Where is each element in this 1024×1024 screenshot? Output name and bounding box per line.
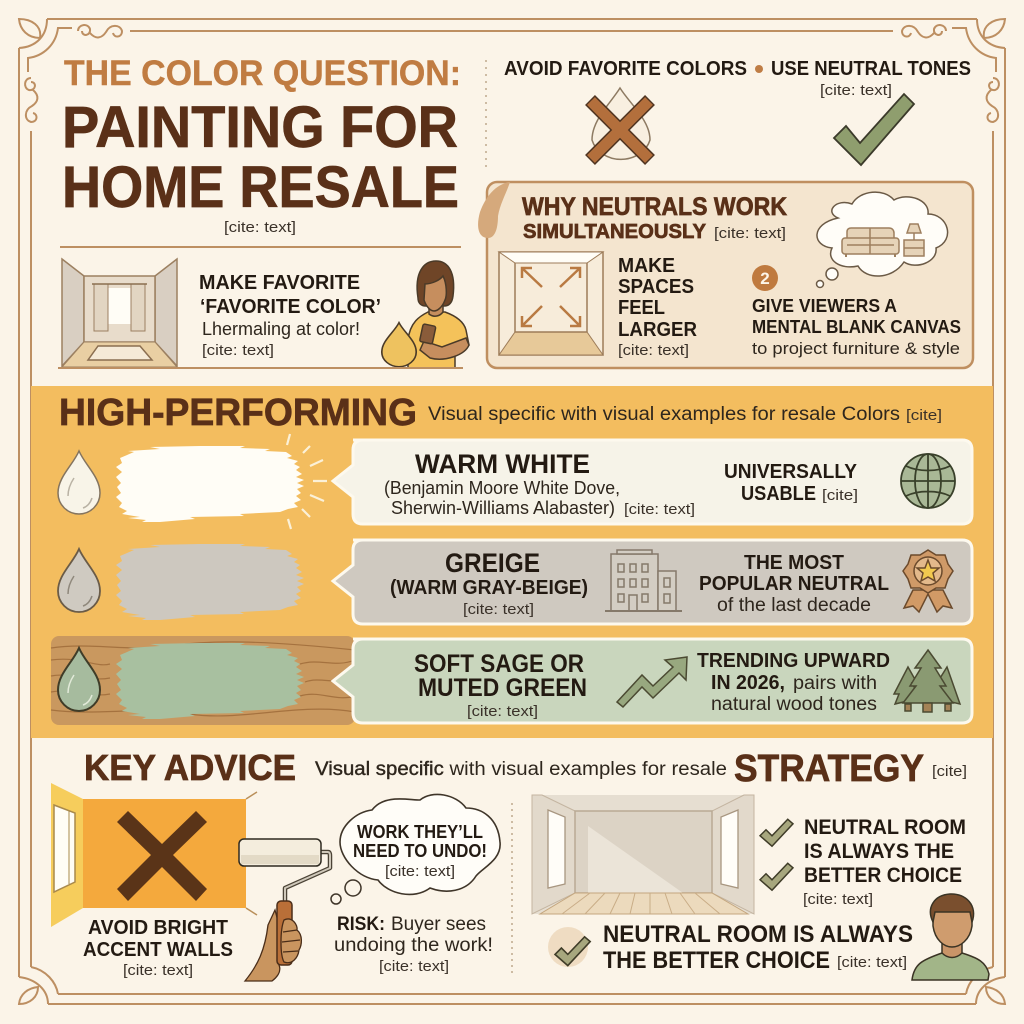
band heading bbox=[59, 392, 942, 434]
sage text: natural wood tones bbox=[711, 694, 877, 715]
text: favorite color: ‘FAVORITE COLOR’ bbox=[200, 296, 381, 318]
heading: key advice strategy: [cite] bbox=[932, 763, 967, 780]
text: make spaces feel larger: FEEL bbox=[618, 297, 665, 319]
sage text: IN 2026, bbox=[711, 672, 785, 694]
text: favorite color: MAKE FAVORITE bbox=[199, 272, 360, 294]
text: mental blank canvas: MENTAL BLANK CANVAS bbox=[752, 317, 961, 337]
icon: check marks bbox=[760, 819, 793, 890]
heading: avoid and use: USE NEUTRAL TONES bbox=[771, 58, 971, 80]
panel heading: SIMULTANEOUSLY bbox=[523, 221, 707, 243]
dotted divider bbox=[485, 60, 487, 167]
heading: key advice strategy: KEY ADVICE bbox=[84, 747, 296, 788]
text: neutral room list: [cite: text] bbox=[803, 891, 873, 908]
text: avoid bright accent walls: AVOID BRIGHT bbox=[88, 917, 228, 939]
text: neutral room list bbox=[803, 816, 966, 908]
text: favorite color: [cite: text] bbox=[202, 342, 274, 359]
panel: why neutrals work bbox=[478, 182, 973, 368]
heading: avoid and use: AVOID FAVORITE COLORS bbox=[504, 58, 747, 80]
text: neutral room conclusion: THE BETTER CHOICE bbox=[603, 947, 830, 974]
icon: expanding room bbox=[499, 252, 603, 355]
greige text: POPULAR NEUTRAL bbox=[699, 573, 889, 595]
icon: globe bbox=[901, 454, 955, 508]
heading: avoid and use bbox=[504, 58, 971, 99]
title: PAINTING FOR bbox=[62, 95, 458, 160]
dotted divider bbox=[511, 803, 513, 975]
text: neutral room conclusion: [cite: text] bbox=[837, 954, 907, 971]
text: neutral room list: IS ALWAYS THE bbox=[804, 840, 954, 863]
text: buyer risk bbox=[334, 914, 493, 975]
text: make spaces feel larger: [cite: text] bbox=[618, 342, 689, 359]
text: favorite color: Lhermaling at color! bbox=[202, 319, 360, 339]
icon: man portrait bbox=[912, 894, 989, 980]
panel heading: WHY NEUTRALS WORK bbox=[522, 193, 787, 221]
thought cloud: work to undo: NEED TO UNDO! bbox=[353, 841, 487, 861]
icon: green check mark bbox=[834, 94, 914, 165]
sage text: SOFT SAGE OR bbox=[414, 650, 584, 678]
text: neutral room conclusion: NEUTRAL ROOM IS ALWAYS bbox=[603, 921, 913, 948]
icon: paint roller and hand bbox=[239, 839, 330, 981]
sage text bbox=[414, 650, 890, 720]
text: neutral room conclusion bbox=[603, 921, 913, 974]
title bbox=[62, 54, 461, 236]
thought cloud: work to undo: WORK THEY’LL bbox=[357, 822, 483, 842]
text: make spaces feel larger: MAKE bbox=[618, 255, 675, 277]
thought cloud: work to undo: [cite: text] bbox=[385, 863, 455, 880]
text: buyer risk: [cite: text] bbox=[379, 958, 449, 975]
warm white text: UNIVERSALLY bbox=[724, 461, 858, 483]
text: buyer risk: RISK: bbox=[337, 914, 385, 935]
divider under title bbox=[60, 246, 461, 248]
text: buyer risk: undoing the work! bbox=[334, 935, 493, 956]
heading: avoid and use: [cite: text] bbox=[820, 82, 892, 99]
wood plank background bbox=[51, 636, 355, 725]
icon: room with curtains bbox=[62, 259, 177, 367]
warm white text: Sherwin-Williams Alabaster) bbox=[391, 498, 615, 518]
paint smear on panel corner bbox=[478, 182, 510, 238]
greige text: THE MOST bbox=[744, 552, 844, 574]
sage text: TRENDING UPWARD bbox=[697, 650, 890, 672]
title: [cite: text] bbox=[224, 219, 296, 236]
sage text: MUTED GREEN bbox=[418, 674, 587, 702]
band heading: HIGH-PERFORMING bbox=[59, 392, 417, 434]
text: neutral room list: NEUTRAL ROOM bbox=[804, 816, 966, 839]
color row: soft sage bbox=[58, 639, 972, 723]
warm white text: (Benjamin Moore White Dove, bbox=[384, 478, 620, 498]
text: avoid bright accent walls: ACCENT WALLS bbox=[83, 939, 233, 961]
icon: person with paint drop bbox=[382, 261, 469, 368]
icon: nightstand and lamp bbox=[904, 224, 924, 256]
text: mental blank canvas bbox=[752, 296, 961, 358]
text: favorite color bbox=[199, 272, 381, 359]
icon: check in circle bbox=[548, 927, 590, 967]
warm white text: [cite] bbox=[822, 487, 858, 504]
title: HOME RESALE bbox=[62, 155, 459, 220]
title: THE COLOR QUESTION: bbox=[64, 54, 461, 93]
thought cloud: work to undo bbox=[331, 794, 500, 904]
warm white text: [cite: text] bbox=[624, 501, 695, 518]
text: neutral room list: BETTER CHOICE bbox=[804, 864, 962, 887]
greige text: (WARM GRAY-BEIGE) bbox=[390, 577, 588, 599]
greige text: GREIGE bbox=[445, 548, 540, 578]
icon: award ribbon bbox=[903, 550, 953, 612]
icon: crossed-out drop bbox=[590, 88, 650, 160]
sage text: pairs with bbox=[793, 673, 877, 694]
icon: neutral empty room bbox=[532, 795, 754, 914]
band heading: Visual specific with visual examples for resale Colors bbox=[428, 404, 900, 425]
text: mental blank canvas: to project furniture & style bbox=[752, 339, 960, 358]
icon: sofa bbox=[842, 228, 899, 257]
warm white text: USABLE bbox=[741, 483, 816, 505]
rule under favorite color row bbox=[58, 367, 463, 369]
thought cloud with furniture bbox=[816, 192, 948, 288]
icon: bright accent wall bbox=[51, 783, 257, 927]
heading: key advice strategy: STRATEGY bbox=[734, 748, 924, 790]
color row: warm white bbox=[58, 434, 972, 529]
greige text bbox=[390, 548, 889, 618]
warm white text bbox=[384, 449, 858, 518]
icon: pine trees bbox=[894, 650, 960, 712]
text: avoid bright accent walls: [cite: text] bbox=[123, 962, 193, 979]
text: make spaces feel larger bbox=[618, 255, 698, 359]
heading: key advice strategy: Visual specific with visual examples for resale bbox=[315, 759, 727, 780]
text: make spaces feel larger: SPACES bbox=[618, 276, 694, 298]
greige text: of the last decade bbox=[717, 595, 871, 616]
sage text: [cite: text] bbox=[467, 703, 538, 720]
panel heading bbox=[522, 193, 787, 243]
greige text: [cite: text] bbox=[463, 601, 534, 618]
band heading: [cite] bbox=[906, 407, 942, 424]
heading: key advice strategy bbox=[84, 747, 967, 790]
panel: high-performing colors bbox=[31, 386, 993, 738]
panel heading: [cite: text] bbox=[714, 225, 786, 242]
warm white text: WARM WHITE bbox=[415, 449, 590, 479]
number badge 2 bbox=[752, 265, 778, 291]
text: make spaces feel larger: LARGER bbox=[618, 319, 698, 341]
icon: building bbox=[605, 550, 682, 611]
text: avoid bright accent walls bbox=[83, 917, 233, 979]
number badge 2: 2 bbox=[760, 269, 770, 288]
text: buyer risk: Buyer sees bbox=[391, 914, 486, 935]
text: mental blank canvas: GIVE VIEWERS A bbox=[752, 296, 897, 316]
icon: upward trend arrow bbox=[617, 657, 687, 707]
color row: greige bbox=[58, 540, 972, 624]
